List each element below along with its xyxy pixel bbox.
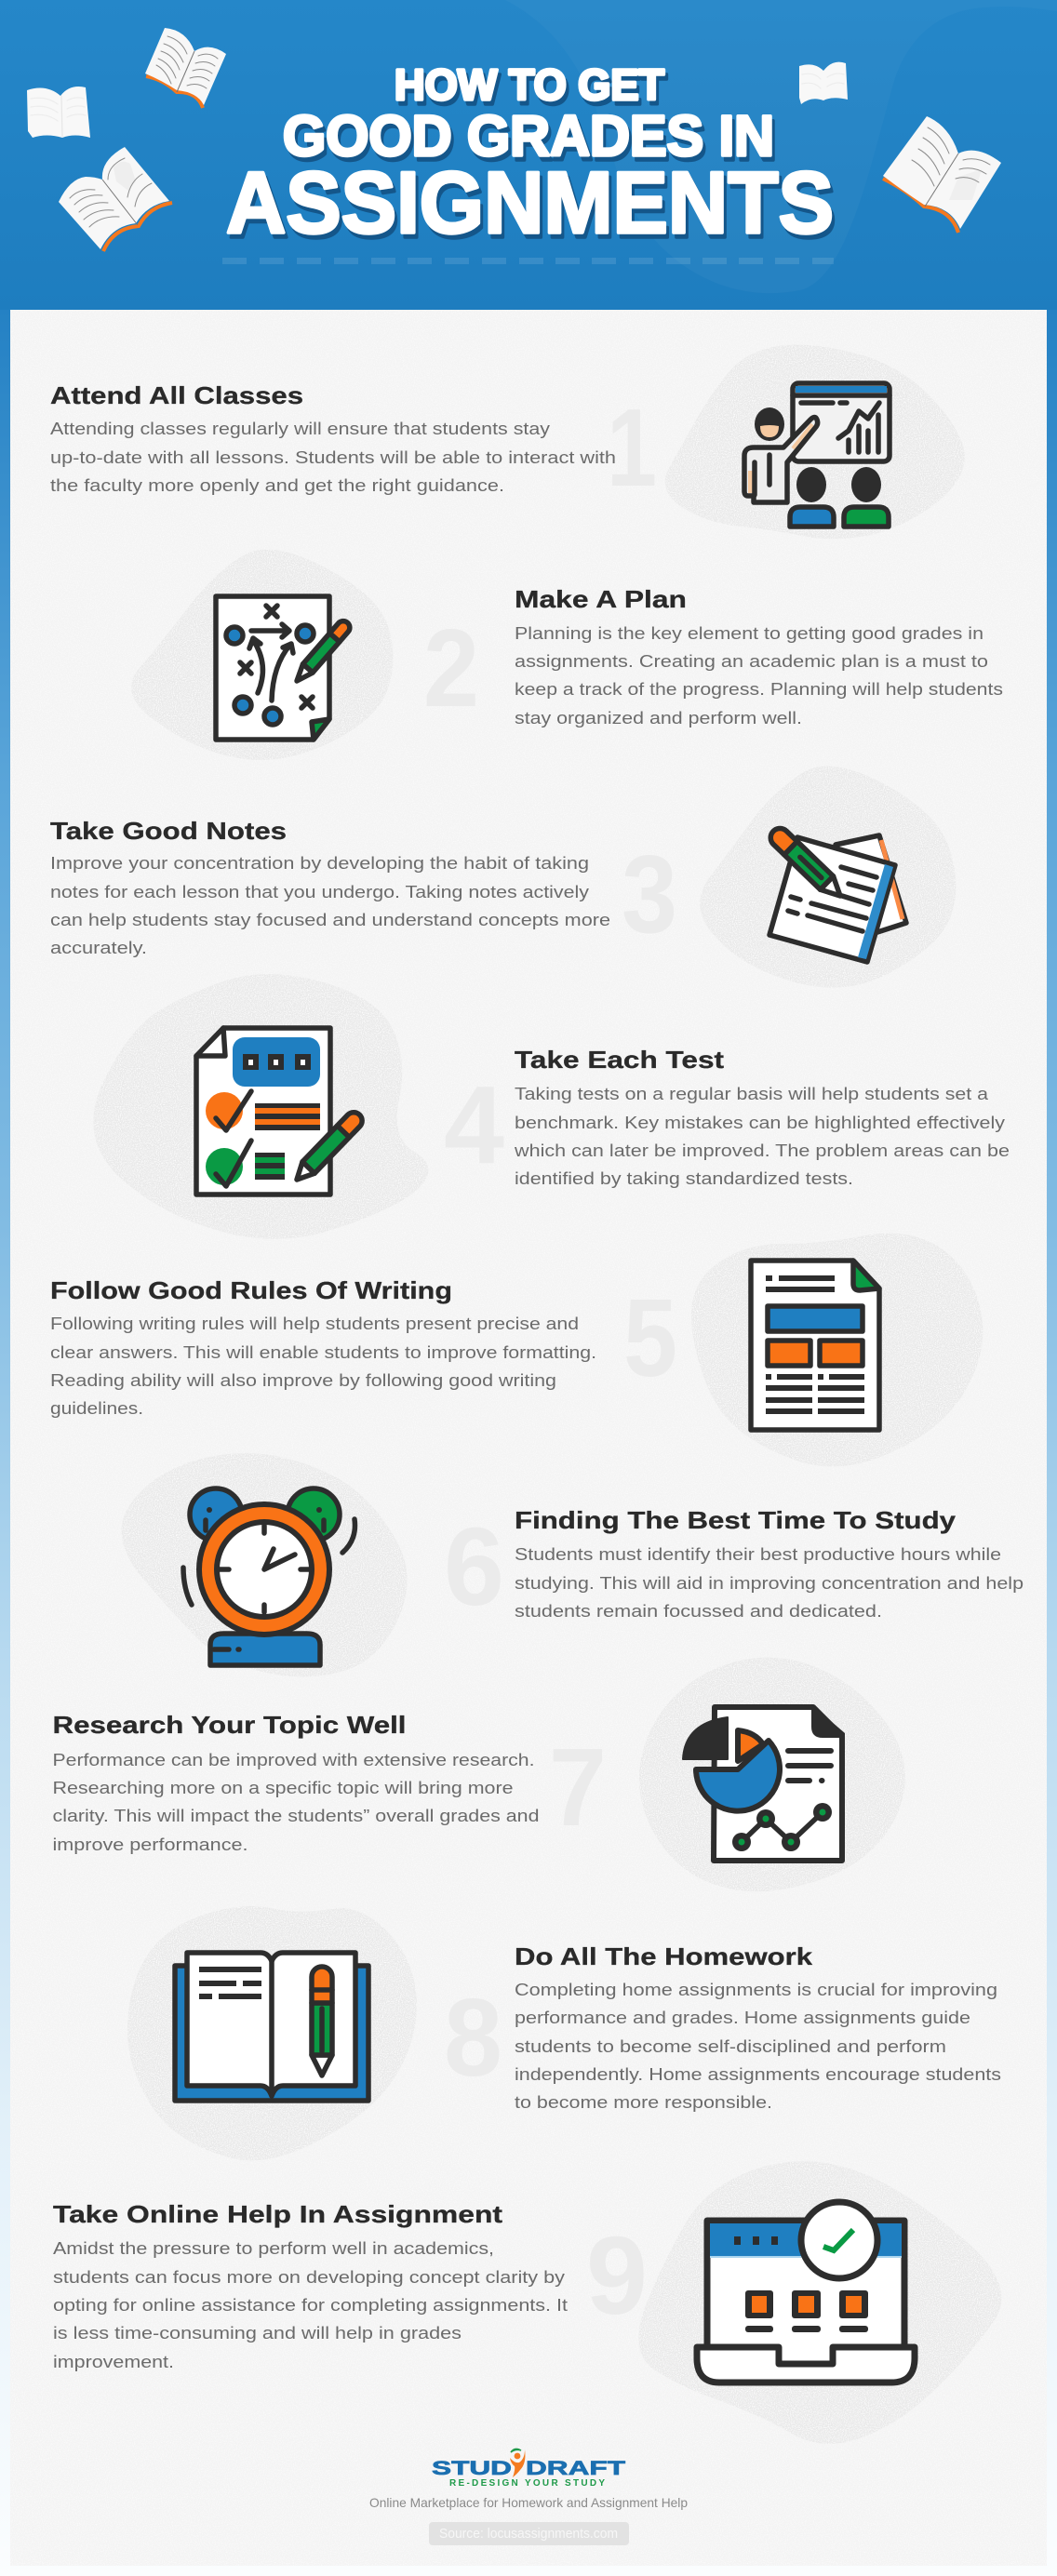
body text [52, 1750, 540, 1854]
body text: stay organized and perform well. [515, 708, 802, 727]
body text: benchmark. Key mistakes can be highlighted effectively [515, 1113, 1006, 1132]
icon: open book right [883, 116, 1001, 233]
body text: assignments. Creating an academic plan is a must to [515, 651, 988, 671]
body text [515, 623, 1003, 727]
body text [515, 1544, 1024, 1621]
body text: students to become self-disciplined and perform [515, 2036, 946, 2056]
heading: Attend All Classes [50, 381, 303, 409]
body text: guidelines. [50, 1398, 143, 1418]
body text: to become more responsible. [515, 2092, 772, 2112]
body text: can help students stay focused and understand concepts more [50, 910, 610, 929]
heading: Take Good Notes [50, 817, 287, 845]
number 5: 5 [623, 1276, 677, 1400]
icon: teacher at board with students [744, 383, 890, 527]
body text: improvement. [53, 2352, 174, 2371]
icon: open book with pencil [175, 1953, 368, 2101]
body text [50, 853, 610, 957]
body text: the faculty more openly and get the right guidance. [50, 475, 504, 495]
blob 3 [700, 767, 956, 988]
source badge [429, 2522, 629, 2545]
blob 9 [638, 2161, 1001, 2444]
body text: Improve your concentration by developing the habit of taking [50, 853, 589, 873]
panel: step 8 do all the homework [127, 1906, 1001, 2160]
body text: Researching more on a specific topic will bring more [52, 1778, 514, 1797]
body text [50, 419, 616, 495]
footer [369, 2449, 688, 2545]
body text: improve performance. [52, 1835, 248, 1854]
heading: Follow Good Rules Of Writing [50, 1276, 452, 1304]
logo: STUD [432, 2458, 512, 2479]
heading: Make A Plan [515, 585, 687, 613]
blob 6 [122, 1453, 408, 1676]
number 4: 4 [444, 1063, 504, 1187]
panel: step 2 make a plan [131, 549, 1003, 760]
blob 7 [639, 1658, 905, 1891]
body text: Reading ability will also improve by following good writing [50, 1370, 556, 1390]
logo: DRAFT [526, 2458, 625, 2479]
body text: Performance can be improved with extensive research. [52, 1750, 534, 1769]
icon: strategy plan paper with pencil [216, 596, 353, 740]
icon: open book top left [145, 28, 226, 108]
body text: performance and grades. Home assignments guide [515, 2008, 970, 2027]
body text: accurately. [50, 938, 147, 957]
tagline: Online Marketplace for Homework and Assignment Help [369, 2495, 688, 2510]
body text: notes for each lesson that you undergo. Taking notes actively [50, 882, 590, 901]
blob 5 [691, 1234, 983, 1466]
title: ASSIGNMENTS [226, 153, 834, 251]
panel: step 9 take online help in assignment [53, 2161, 1001, 2444]
panel: step 6 finding the best time to study [122, 1453, 1024, 1676]
body text: Following writing rules will help students present precise and [50, 1314, 579, 1333]
panel: step 7 research your topic well [52, 1658, 905, 1891]
heading: Take Online Help In Assignment [53, 2200, 502, 2228]
icon: alarm clock [183, 1488, 355, 1665]
title dashes [222, 258, 834, 264]
number 1: 1 [607, 386, 657, 510]
body text: independently. Home assignments encourage students [515, 2064, 1001, 2084]
panel: step 5 follow good rules of writing [50, 1234, 983, 1466]
icon: notes with pencil [767, 824, 906, 962]
body text: Completing home assignments is crucial for improving [515, 1980, 997, 1999]
number 2: 2 [423, 607, 479, 730]
source badge: Source: locusassignments.com [439, 2526, 618, 2542]
blob 8 [127, 1906, 417, 2160]
body text: keep a track of the progress. Planning will help students [515, 679, 1003, 699]
body text: studying. This will aid in improving concentration and help [515, 1573, 1024, 1593]
body text [514, 1084, 1010, 1188]
heading: Research Your Topic Well [52, 1711, 406, 1739]
icon: open book lower left [59, 147, 172, 251]
body text: Taking tests on a regular basis will help students set a [515, 1084, 989, 1103]
icon: laptop with check mark [697, 2202, 915, 2382]
body text: students can focus more on developing concept clarity by [53, 2267, 566, 2287]
header banner [0, 0, 1057, 310]
logo [432, 2449, 625, 2489]
body text: Attending classes regularly will ensure that students stay [50, 419, 551, 438]
number 6: 6 [444, 1505, 504, 1629]
number 8: 8 [444, 1976, 502, 2100]
logo: RE-DESIGN YOUR STUDY [449, 2478, 605, 2489]
title: HOW TO GET [395, 60, 664, 109]
heading: Finding The Best Time To Study [515, 1506, 957, 1534]
icon: open book left [27, 87, 90, 138]
number 3: 3 [622, 833, 677, 956]
icon: written document [751, 1261, 879, 1430]
body text: clarity. This will impact the students” overall grades and [52, 1806, 540, 1825]
number 7: 7 [549, 1726, 607, 1849]
heading: Take Each Test [515, 1046, 724, 1074]
body text: Students must identify their best productive hours while [515, 1544, 1001, 1564]
body text: is less time-consuming and will help in grades [53, 2323, 462, 2342]
body text: clear answers. This will enable students to improve formatting. [50, 1342, 596, 1362]
panel: step 1 attend all classes [50, 345, 965, 539]
body text: Amidst the pressure to perform well in academics, [53, 2238, 494, 2258]
blob 2 [131, 549, 394, 760]
body text: identified by taking standardized tests. [515, 1168, 853, 1188]
body text: up-to-date with all lessons. Students will be able to interact with [50, 447, 616, 467]
body text [515, 1980, 1001, 2112]
blob 4 [93, 974, 428, 1239]
body text: opting for online assistance for completing assignments. It [53, 2295, 568, 2315]
panel: step 4 take each test [93, 974, 1010, 1239]
blob 1 [665, 345, 965, 539]
body text [53, 2238, 568, 2371]
icon: test checklist with pencil [196, 1028, 366, 1195]
body text [50, 1314, 596, 1418]
icon: report with pie and line chart [683, 1704, 845, 1861]
icon: open book top right small [799, 62, 848, 104]
number 9: 9 [586, 2214, 648, 2338]
panel: step 3 take good notes [50, 767, 956, 988]
body text: Planning is the key element to getting good grades in [515, 623, 983, 643]
heading: Do All The Homework [515, 1942, 813, 1970]
title: GOOD GRADES IN [283, 104, 774, 167]
body text: which can later be improved. The problem areas can be [514, 1141, 1010, 1160]
body text: students remain focussed and dedicated. [515, 1601, 882, 1621]
title [226, 60, 834, 251]
